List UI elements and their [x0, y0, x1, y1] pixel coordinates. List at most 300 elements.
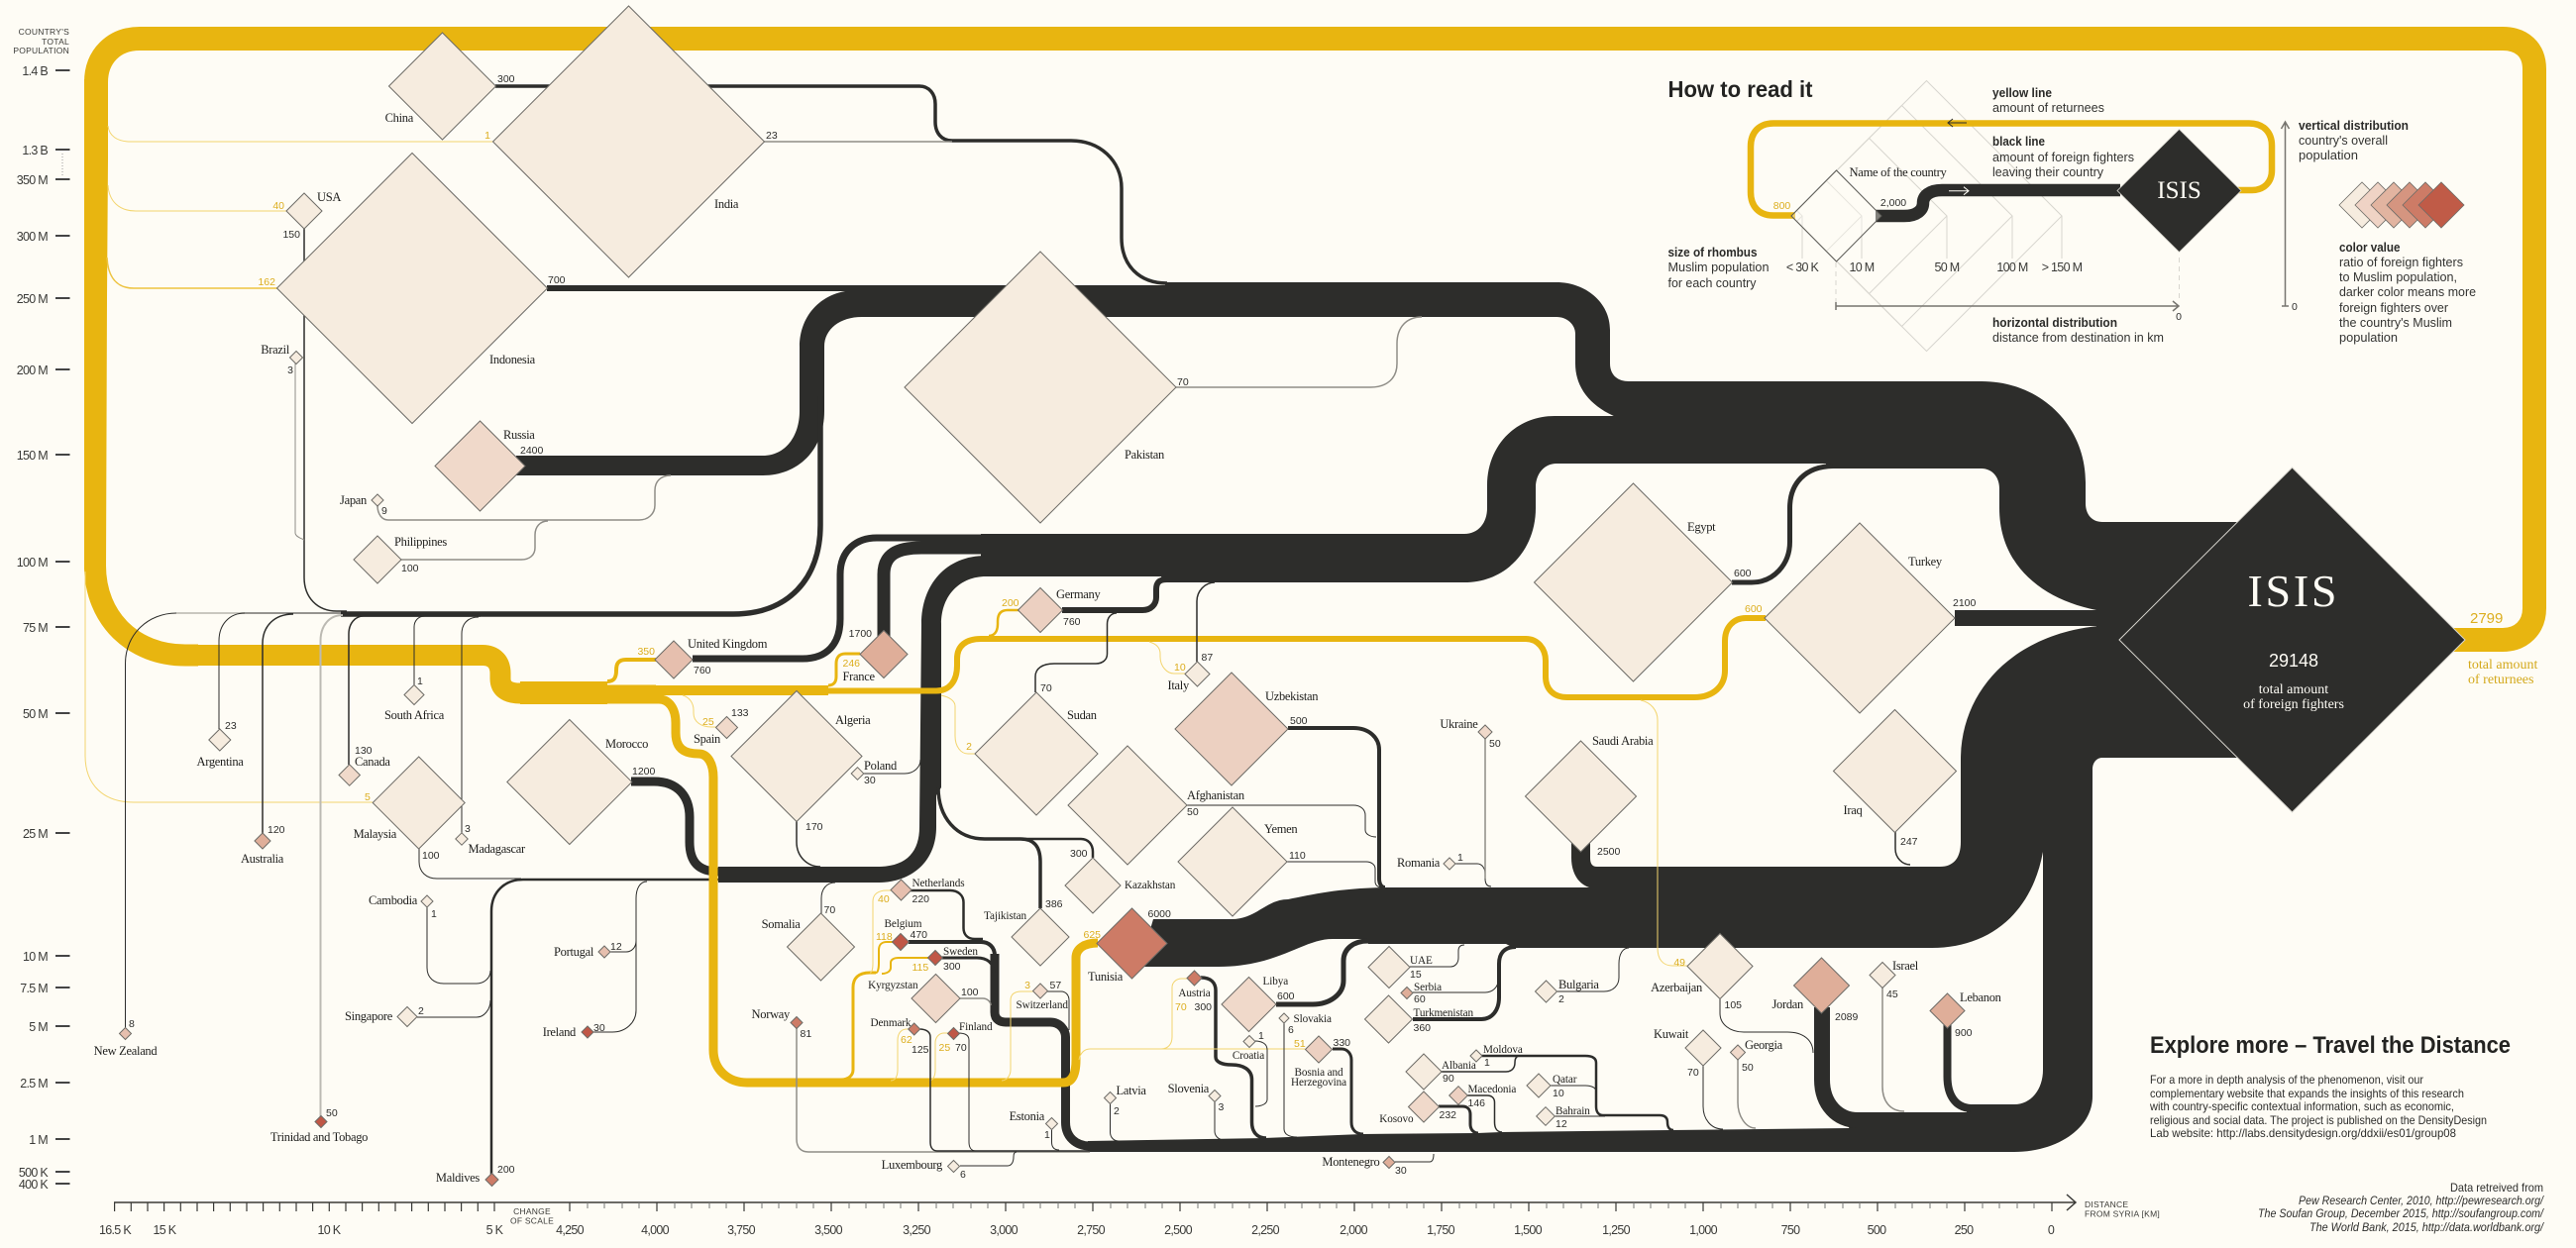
vertical distribution text: country's overall	[2299, 133, 2388, 148]
country: Kuwait: 70	[1687, 1067, 1699, 1079]
distance labels: 2,250	[1251, 1223, 1280, 1237]
country: Bosnia and Herzegovina: 51	[1294, 1038, 1306, 1050]
country: Lebanon: Lebanon	[1960, 990, 2002, 1004]
country: Tunisia: 6000	[1147, 908, 1171, 920]
country: Kyrgyzstan	[868, 975, 979, 1022]
country: Madagascar: Madagascar	[468, 842, 526, 856]
country: Morocco: Morocco	[605, 737, 648, 751]
axis title: TOTAL	[42, 37, 69, 47]
country: Somalia: Somalia	[762, 917, 801, 931]
horizontal distribution text	[1992, 315, 2164, 345]
panel: how to read it: 0	[2292, 301, 2298, 313]
country: United Kingdom	[637, 637, 768, 678]
vertical axis	[2281, 122, 2289, 306]
country: Montenegro: Montenegro	[1322, 1155, 1380, 1169]
country: Albania: Albania	[1442, 1060, 1476, 1072]
country: Romania: Romania	[1397, 856, 1441, 870]
distance labels: 1,750	[1427, 1223, 1455, 1237]
country: Latvia	[1104, 1084, 1146, 1117]
country: Uzbekistan	[1175, 673, 1319, 785]
scale labels: 75 M	[23, 621, 48, 635]
country: Denmark: 125	[912, 1044, 929, 1056]
size of rhombus text	[1668, 245, 1770, 290]
yellow flows: returnees	[84, 39, 2534, 1083]
country: Kosovo: Kosovo	[1379, 1113, 1414, 1125]
country: South Africa: South Africa	[384, 708, 445, 722]
horizontal distribution text: distance from destination in km	[1992, 330, 2164, 345]
country: Turkmenistan	[1365, 995, 1474, 1043]
country: New Zealand	[94, 1018, 158, 1058]
country: Uzbekistan: Uzbekistan	[1265, 689, 1319, 703]
country: Sweden: 300	[943, 961, 961, 973]
country: Spain	[694, 707, 749, 746]
country: Netherlands: 40	[878, 893, 890, 905]
colour value text	[2339, 240, 2476, 345]
country: Morocco	[507, 719, 656, 844]
country: Bulgaria	[1536, 978, 1599, 1005]
country: Kyrgyzstan: 100	[961, 987, 979, 998]
distance labels: 10 K	[318, 1223, 342, 1237]
scale labels: 5 M	[29, 1020, 48, 1034]
colour value text: foreign fighters over	[2339, 300, 2449, 315]
country: Argentina: Argentina	[196, 755, 244, 769]
explore more paragraph: with country-specific contextual information, such as economic,	[2149, 1099, 2454, 1113]
country: Iraq: 247	[1900, 836, 1918, 848]
country: Cambodia	[369, 893, 437, 920]
axis line and arrow	[114, 1195, 2076, 1210]
change of scale note: CHANGE	[513, 1206, 551, 1216]
legend yellow line	[1751, 123, 2272, 216]
country: Italy	[1167, 652, 1213, 692]
country: India	[484, 6, 778, 277]
country: Norway: 81	[801, 1028, 811, 1040]
country: Tajikistan	[984, 898, 1069, 966]
scale labels: 200 M	[17, 364, 48, 377]
tick marks	[55, 70, 69, 1184]
country: Macedonia	[1449, 1084, 1516, 1109]
country: China: China	[385, 111, 414, 125]
total returnees label: 2799	[2470, 610, 2503, 627]
colour value text: color value	[2339, 240, 2400, 255]
country: Slovenia: Slovenia	[1168, 1082, 1210, 1095]
country: Malaysia: 100	[422, 850, 440, 862]
country: Singapore: 2	[418, 1005, 424, 1017]
black line text	[1992, 134, 2134, 179]
country: Lebanon: 900	[1955, 1027, 1973, 1039]
country: Japan: Japan	[340, 493, 368, 507]
country: Jordan: Jordan	[1771, 997, 1804, 1011]
scale labels: 10 M	[23, 950, 48, 964]
country: Portugal	[554, 941, 622, 959]
axis title	[13, 27, 69, 55]
country: Slovenia	[1168, 1082, 1225, 1113]
country: Bahrain: Bahrain	[1556, 1105, 1590, 1117]
country: Bosnia and Herzegovina: 330	[1334, 1037, 1350, 1049]
country: Saudi Arabia	[1526, 734, 1654, 858]
country: Trinidad and Tobago: Trinidad and Tobago	[270, 1130, 368, 1144]
legend numbers: Name of the country	[1849, 165, 1948, 179]
country: New Zealand: 8	[129, 1018, 135, 1030]
country: Austria	[1175, 971, 1212, 1013]
country: Russia: Russia	[503, 428, 535, 442]
country: China	[385, 33, 515, 140]
country: Qatar: Qatar	[1553, 1074, 1577, 1086]
size of rhombus text: Muslim population	[1668, 260, 1770, 274]
country: Slovakia: Slovakia	[1294, 1013, 1332, 1025]
country: Switzerland: Switzerland	[1017, 999, 1068, 1011]
country: Azerbaijan: 49	[1673, 957, 1685, 969]
axis title: COUNTRY'S	[19, 27, 69, 37]
country: Poland	[851, 759, 898, 786]
country: UAE	[1368, 947, 1433, 988]
country: Slovakia: 6	[1288, 1024, 1294, 1036]
black line text: leaving their country	[1992, 164, 2103, 179]
country: Azerbaijan	[1651, 933, 1753, 1011]
country: Austria: Austria	[1178, 988, 1211, 999]
data sources: The World Bank, 2015, http://data.worldbank.org/	[2309, 1220, 2545, 1234]
ISIS destination rhombus: ISIS	[2247, 566, 2336, 616]
country: Italy: 87	[1201, 652, 1213, 664]
scale labels: 500 K	[19, 1166, 49, 1180]
country: Egypt: Egypt	[1687, 520, 1716, 534]
country: Canada	[339, 745, 390, 785]
distance labels: 1,000	[1689, 1223, 1718, 1237]
country: Maldives: Maldives	[436, 1171, 480, 1185]
country: Sweden	[912, 946, 978, 974]
country: Israel: Israel	[1892, 959, 1919, 973]
country: USA: USA	[317, 190, 341, 204]
country: Madagascar: 3	[465, 823, 471, 835]
country: Maldives	[436, 1164, 515, 1187]
country: Moldova	[1470, 1044, 1523, 1069]
country: Lebanon	[1930, 990, 2002, 1039]
scale labels: 250 M	[17, 292, 48, 306]
size labels	[1786, 260, 2083, 274]
country: Belgium: Belgium	[884, 918, 922, 930]
country: Bahrain	[1537, 1105, 1590, 1130]
total returnees label: of returnees	[2468, 673, 2533, 687]
data sources: Pew Research Center, 2010, http://pewresearch.org/	[2299, 1194, 2544, 1207]
country: Iraq: Iraq	[1843, 803, 1863, 817]
country: Serbia: 60	[1414, 993, 1426, 1005]
horizontal axis	[1836, 258, 2180, 311]
country: Belgium: 470	[910, 929, 927, 941]
country: Jordan	[1771, 958, 1859, 1023]
country: USA	[272, 190, 341, 241]
country: Ukraine	[1440, 717, 1501, 750]
country: Germany: 200	[1002, 597, 1020, 609]
scale labels: 50 M	[23, 707, 48, 721]
distance labels: 15 K	[154, 1223, 177, 1237]
change of scale note	[510, 1206, 554, 1226]
country: Yemen: 110	[1289, 850, 1306, 862]
country: Pakistan	[905, 252, 1189, 523]
country: Australia	[241, 824, 285, 866]
country: Brazil: 3	[287, 364, 293, 376]
country: UAE: UAE	[1410, 955, 1433, 967]
yellow line text: amount of returnees	[1992, 100, 2104, 115]
country: Norway: Norway	[752, 1007, 791, 1021]
distance labels: 3,250	[903, 1223, 931, 1237]
country: Latvia: Latvia	[1116, 1084, 1146, 1097]
country: Estonia: Estonia	[1010, 1109, 1045, 1123]
distance labels: 2,000	[1340, 1223, 1368, 1237]
country: Switzerland: 57	[1050, 980, 1061, 991]
country: Somalia: 70	[824, 904, 835, 916]
black line text: black line	[1992, 134, 2045, 149]
country: Malaysia: 5	[365, 791, 371, 803]
country: Algeria: 170	[805, 821, 823, 833]
distance labels: 5 K	[486, 1223, 504, 1237]
country: Egypt	[1534, 483, 1752, 681]
country: Maldives: 200	[497, 1164, 515, 1176]
country: India: 23	[766, 130, 778, 142]
yellow line text: yellow line	[1992, 85, 2052, 100]
country: Bosnia and Herzegovina	[1291, 1036, 1350, 1089]
country: UAE: 15	[1410, 969, 1422, 981]
country: Austria: 70	[1175, 1001, 1187, 1013]
country: Belgium: 118	[876, 931, 893, 943]
legend ISIS rhombus	[2117, 129, 2241, 252]
country: Ukraine: 50	[1489, 738, 1501, 750]
legend numbers: 800	[1773, 200, 1790, 212]
country: Luxembourg	[882, 1158, 966, 1181]
country: Denmark: Denmark	[870, 1017, 912, 1029]
distance labels: 0	[2048, 1223, 2055, 1237]
colour value text: darker color means more	[2339, 284, 2476, 299]
country: Spain: Spain	[694, 732, 721, 746]
country: Japan	[340, 493, 387, 517]
country: Luxembourg: 6	[960, 1169, 966, 1181]
country: Algeria	[731, 691, 871, 833]
distance labels: 3,000	[990, 1223, 1019, 1237]
major ticks	[115, 1202, 2052, 1211]
data sources	[2258, 1181, 2545, 1234]
country: Kazakhstan: 300	[1070, 848, 1088, 860]
vertical distribution text	[2299, 118, 2409, 162]
country: Indonesia: 162	[258, 276, 275, 288]
country: Ireland: Ireland	[543, 1025, 577, 1039]
country: New Zealand: New Zealand	[94, 1044, 158, 1058]
country: Tunisia: Tunisia	[1088, 970, 1124, 984]
country: Finland: Finland	[959, 1021, 993, 1033]
country: Sudan	[966, 682, 1098, 815]
scale labels: 7.5 M	[20, 982, 48, 995]
country: Denmark	[870, 1017, 929, 1056]
black line text: amount of foreign fighters	[1992, 150, 2134, 164]
country: Germany: 760	[1063, 616, 1081, 628]
country: Poland: Poland	[864, 759, 898, 773]
ISIS destination rhombus: 29148	[2269, 651, 2318, 671]
country: Kosovo: 232	[1439, 1109, 1456, 1121]
country: Somalia	[762, 904, 854, 981]
country: Indonesia: 700	[548, 274, 566, 286]
country: Kyrgyzstan: Kyrgyzstan	[868, 980, 918, 991]
country: Kazakhstan	[1065, 848, 1176, 913]
black flows: medium country lines	[341, 86, 1971, 1175]
ISIS destination rhombus	[2119, 468, 2465, 812]
country: Bulgaria: 2	[1558, 993, 1564, 1005]
country: Norway	[752, 1007, 811, 1040]
country: Bosnia and Herzegovina: Bosnia and	[1294, 1067, 1343, 1079]
country: France: France	[842, 670, 875, 683]
legend numbers	[1773, 165, 1948, 212]
colour scale rhombi	[2339, 182, 2464, 228]
country: Brazil	[261, 343, 303, 376]
country: Qatar	[1527, 1074, 1577, 1099]
size labels: > 150 M	[2042, 260, 2083, 274]
explore more paragraph: Lab website: http://labs.densitydesign.org/ddxii/es01/group08	[2150, 1126, 2456, 1140]
country: Sweden: 115	[912, 962, 928, 974]
country: Egypt: 600	[1734, 568, 1752, 579]
country: Indonesia: Indonesia	[489, 353, 536, 366]
country: Finland: 70	[955, 1042, 967, 1054]
country: Albania	[1406, 1054, 1476, 1090]
country: Pakistan: 70	[1177, 376, 1189, 388]
country: Jordan: 2089	[1835, 1011, 1859, 1023]
country: Netherlands	[878, 878, 964, 905]
country: Argentina	[196, 720, 244, 769]
distance axis	[99, 1195, 2160, 1237]
country: Trinidad and Tobago: 50	[326, 1107, 338, 1119]
country: Afghanistan: Afghanistan	[1187, 788, 1245, 802]
country: Argentina: 23	[225, 720, 237, 732]
country: Bosnia and Herzegovina: Herzegovina	[1291, 1077, 1346, 1089]
country: Tunisia	[1084, 908, 1171, 984]
thin country lines	[125, 142, 1910, 1166]
country: United Kingdom: United Kingdom	[688, 637, 768, 651]
country: Russia: 2400	[520, 445, 544, 457]
data sources: Data retreived from	[2450, 1181, 2543, 1195]
country: South Africa: 1	[417, 676, 423, 687]
size labels: 10 M	[1849, 260, 1875, 274]
scale labels: 350 M	[17, 173, 48, 187]
scale labels: 1 M	[29, 1133, 48, 1147]
distance axis title	[2085, 1199, 2160, 1218]
country: Sudan: 2	[966, 741, 972, 753]
country: Slovakia	[1279, 1013, 1332, 1036]
country: Latvia: 2	[1114, 1105, 1120, 1117]
country: Afghanistan	[1068, 746, 1245, 865]
yellow line text	[1992, 85, 2104, 115]
country: Montenegro: 30	[1395, 1165, 1407, 1177]
country: Brazil: Brazil	[261, 343, 290, 357]
direction arrows	[1948, 119, 1967, 127]
country: Serbia	[1401, 982, 1442, 1005]
country: Philippines: 100	[401, 563, 419, 574]
country: France: 246	[842, 658, 860, 670]
country: Libya: 600	[1277, 990, 1295, 1002]
country: Cambodia: 1	[431, 908, 437, 920]
legend country rhombus	[1791, 170, 1881, 261]
legend numbers: 2,000	[1880, 197, 1906, 209]
panel: how to read it	[1668, 76, 2476, 351]
country: Turkey: 600	[1745, 603, 1763, 615]
distance labels: 3,500	[814, 1223, 843, 1237]
explore more paragraph: complementary website that expands the insights of this research	[2150, 1087, 2464, 1100]
ISIS destination rhombus: total amount	[2259, 682, 2328, 697]
country: Azerbaijan: Azerbaijan	[1651, 981, 1703, 994]
country: Germany	[1002, 587, 1101, 632]
country: Croatia	[1233, 1030, 1264, 1062]
explore more heading: Explore more – Travel the Distance	[2150, 1032, 2511, 1059]
scale labels	[17, 64, 49, 1192]
ISIS destination rhombus: of foreign fighters	[2243, 697, 2344, 712]
colour value text: the country's Muslim	[2339, 315, 2452, 330]
country: Uzbekistan: 500	[1290, 715, 1308, 727]
country: Kuwait: Kuwait	[1654, 1027, 1689, 1041]
legend ISIS rhombus: ISIS	[2157, 177, 2201, 204]
distance labels: 4,000	[641, 1223, 670, 1237]
country: Malaysia: Malaysia	[354, 827, 397, 841]
country: Spain: 25	[702, 716, 714, 728]
country: USA: 150	[282, 229, 300, 241]
country: Spain: 133	[731, 707, 749, 719]
country: India: 1	[484, 130, 490, 142]
country: United Kingdom: 760	[694, 665, 711, 676]
distance labels: 1,250	[1602, 1223, 1631, 1237]
country: Moldova: Moldova	[1483, 1044, 1523, 1056]
country: Madagascar	[456, 823, 526, 856]
country: Portugal: 12	[610, 941, 622, 953]
country: Philippines: Philippines	[394, 535, 447, 549]
country: Indonesia	[258, 153, 566, 424]
country: Germany: Germany	[1056, 587, 1101, 601]
country: Bulgaria: Bulgaria	[1558, 978, 1599, 991]
distance labels: 250	[1955, 1223, 1974, 1237]
size of rhombus text: size of rhombus	[1668, 245, 1758, 260]
country: Yemen	[1178, 807, 1306, 916]
country: Luxembourg: Luxembourg	[882, 1158, 943, 1172]
distance labels: 1,500	[1514, 1223, 1543, 1237]
country: Singapore: Singapore	[345, 1009, 393, 1023]
size scale rhombi	[1791, 81, 2062, 351]
colour value text: to Muslim population,	[2339, 269, 2457, 284]
country: Azerbaijan: 105	[1724, 999, 1742, 1011]
country: Libya: Libya	[1262, 976, 1288, 988]
scale labels: 1.3 B	[22, 144, 48, 157]
distance labels: 500	[1868, 1223, 1886, 1237]
data sources: The Soufan Group, December 2015, http://soufangroup.com/	[2258, 1206, 2544, 1220]
country: Turkey: Turkey	[1908, 555, 1943, 569]
country: Ireland: 30	[593, 1022, 605, 1034]
colour value text: ratio of foreign fighters	[2339, 255, 2463, 269]
country: Canada: 130	[355, 745, 373, 757]
explore more paragraph: For a more in depth analysis of the phenomenon, visit our	[2150, 1073, 2423, 1087]
scale labels: 1.4 B	[22, 64, 48, 78]
horizontal distribution text: horizontal distribution	[1992, 315, 2117, 330]
country: Italy: 10	[1174, 662, 1186, 674]
country: Bahrain: 12	[1556, 1118, 1567, 1130]
country: Iraq	[1833, 709, 1956, 848]
country: Qatar: 10	[1553, 1088, 1564, 1099]
country: Croatia: Croatia	[1233, 1050, 1264, 1062]
distance labels: 4,250	[556, 1223, 585, 1237]
black flows: thick bands of fighters into ISIS	[516, 282, 2279, 1152]
country: USA: 40	[272, 200, 284, 212]
country: Saudi Arabia: 2500	[1597, 846, 1621, 858]
country: Kuwait	[1654, 1027, 1721, 1079]
explore more paragraph	[2149, 1073, 2487, 1140]
country: India: India	[714, 197, 739, 211]
scale labels: 2.5 M	[20, 1077, 48, 1091]
country: Macedonia: Macedonia	[1468, 1084, 1516, 1095]
distance axis title: FROM SYRIA [KM]	[2085, 1208, 2160, 1218]
country: Israel	[1870, 959, 1919, 1000]
explore more paragraph: religious and social data. The project is published on the DensityDesign	[2150, 1113, 2487, 1127]
scale labels: 300 M	[17, 230, 48, 244]
country: Israel: 45	[1886, 988, 1898, 1000]
